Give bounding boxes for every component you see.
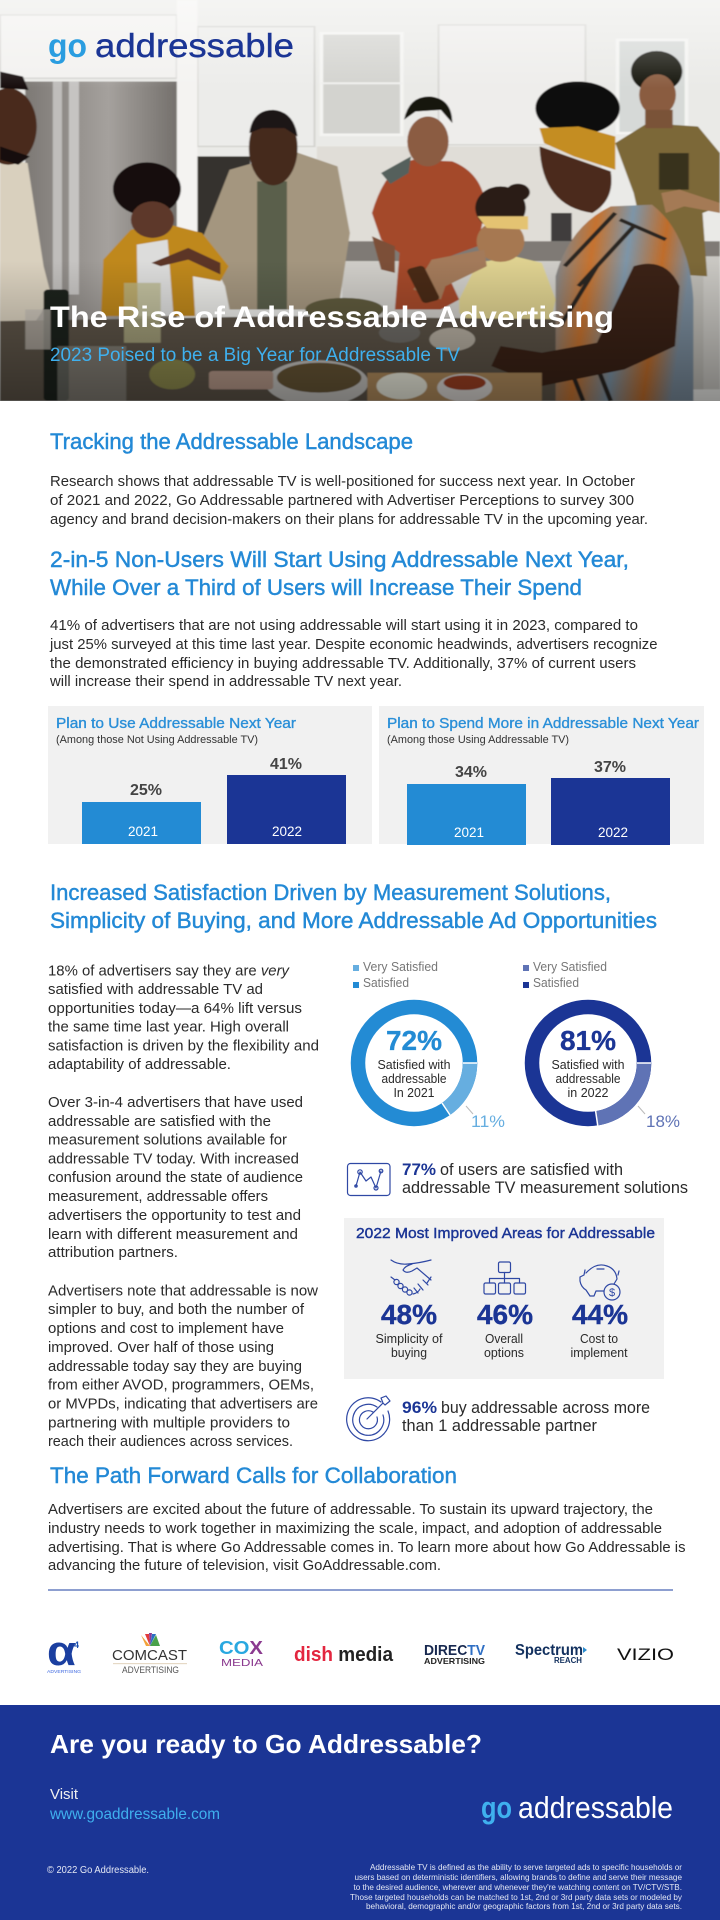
text block: non-user stats	[49, 618, 657, 690]
callout: 96% partners	[402, 1398, 650, 1435]
text block: satisfaction paragraph 1: 18% of advertisers say they are very	[48, 964, 290, 980]
icon: piggy bank	[580, 1265, 620, 1300]
text block: path forward	[48, 1502, 686, 1574]
legend: 2022: Satisfied	[533, 975, 579, 990]
bar: 2021	[82, 802, 201, 844]
logo: dish media: dish media	[294, 1644, 394, 1666]
heading: increased satisfaction: Simplicity of Buying, and More Addressable Ad Opportunities	[50, 908, 657, 933]
text block: satisfaction paragraph 2: attribution partners.	[48, 1245, 178, 1261]
panel: plan to use bar chart: Plan to Use Addressable Next Year	[56, 715, 296, 732]
panel: 2022 most improved areas: Simplicity of	[376, 1331, 443, 1346]
text block: research intro: agency and brand decision-makers on their plans for addressable TV in the upcoming year.	[50, 512, 648, 528]
text block: satisfaction paragraph 2: learn with different measurement and	[48, 1227, 298, 1243]
panel: plan to use bar chart: 2022	[272, 824, 302, 839]
footer logo: go	[481, 1790, 512, 1825]
legend: 2022	[523, 959, 607, 990]
text block: satisfaction paragraph 3: Advertisers note that addressable is now	[48, 1284, 319, 1300]
text block: satisfaction paragraph 3: from either AVOD, programmers, OEMs,	[48, 1378, 314, 1394]
bar: 2022	[227, 775, 346, 844]
donut chart: 2021 satisfaction: 11%	[471, 1112, 505, 1131]
donut chart: 2021 satisfaction: Satisfied with	[378, 1057, 450, 1072]
text block: satisfaction paragraph 1: opportunities today—a 64% lift versus	[48, 1001, 302, 1017]
logo: cox media: COX	[219, 1638, 263, 1658]
logo: a4 advertising: α	[47, 1627, 76, 1674]
text block: satisfaction paragraph 2: Over 3-in-4 advertisers that have used	[48, 1095, 303, 1111]
text block: satisfaction paragraph 3: options and cost to implement have	[48, 1321, 284, 1337]
text block: satisfaction paragraph 2: advertisers the opportunity to test and	[48, 1208, 301, 1224]
hero title: The Rise of Addressable Advertising	[50, 301, 614, 334]
heading: increased satisfaction	[50, 880, 657, 933]
text block: path forward: advertising. That is where Go Addressable comes in. To learn more about how Go Addressable is	[48, 1540, 686, 1556]
text block: satisfaction paragraph 1: the same time last year. High overall	[48, 1020, 289, 1036]
heading: non-users	[50, 547, 629, 600]
logo: comcast advertising: ADVERTISING	[122, 1665, 179, 1675]
panel: plan to spend bar chart	[379, 706, 704, 845]
text block: non-user stats: the demonstrated efficiency in buying addressable TV. Additionally, 37% of current users	[50, 656, 636, 672]
panel: 2022 most improved areas: buying	[391, 1345, 427, 1360]
text block: satisfaction paragraph 1: adaptability of addressable.	[48, 1057, 231, 1073]
callout: 96% partners: than 1 addressable partner	[402, 1416, 597, 1435]
logo: cox media	[219, 1638, 263, 1669]
icon: org chart	[484, 1262, 526, 1294]
legend: 2021: Satisfied	[363, 975, 409, 990]
text block: satisfaction paragraph 3: or MVPDs, indicating that advertisers are	[48, 1396, 318, 1412]
callout: 96% partners: 96%	[402, 1398, 437, 1417]
disclaimer: Addressable TV is defined as the ability to serve targeted ads to specific households or	[370, 1862, 682, 1872]
panel: 2022 most improved areas: 2022 Most Improved Areas for Addressable	[356, 1225, 655, 1242]
donut chart: 2021 satisfaction: In 2021	[394, 1085, 434, 1100]
heading: increased satisfaction: Increased Satisfaction Driven by Measurement Solutions,	[50, 880, 611, 905]
panel: 2022 most improved areas: 48%	[381, 1299, 437, 1330]
hero subtitle: 2023 Poised to be a Big Year for Addressable TV	[50, 344, 460, 366]
logo: vizio: VIZIO	[617, 1645, 674, 1664]
text block: satisfaction paragraph 3: simpler to buy, and both the number of	[48, 1302, 305, 1318]
text block: path forward: advancing the future of television, visit GoAddressable.com.	[48, 1558, 441, 1574]
callout: 77% measurement: addressable TV measurement solutions	[402, 1178, 688, 1197]
panel: plan to use bar chart: 2021	[128, 824, 158, 839]
footer logo: addressable	[518, 1790, 673, 1825]
disclaimer: users based on deterministic identifiers, allowing brands to define and serve their message	[354, 1872, 682, 1882]
panel: plan to spend bar chart: 2021	[454, 825, 484, 840]
donut chart: 2022 satisfaction: 18%	[646, 1112, 680, 1131]
panel: 2022 most improved areas: 44%	[572, 1299, 628, 1330]
disclaimer: behavioral, demographic and/or geographic factors from 1st, 2nd or 3rd party data sets.	[366, 1901, 682, 1911]
copyright: © 2022 Go Addressable.	[47, 1865, 149, 1876]
text block: satisfaction paragraph 2: addressable are satisfied with the	[48, 1114, 271, 1130]
logo: go addressable: addressable	[95, 27, 294, 64]
text block: satisfaction paragraph 2: measurement, addressable offers	[48, 1189, 268, 1205]
logo: directv advertising: ADVERTISING	[424, 1656, 485, 1666]
donut chart: 2022 satisfaction: Satisfied with	[552, 1057, 624, 1072]
legend: 2022: Very Satisfied	[533, 959, 607, 974]
text block: research intro: of 2021 and 2022, Go Addressable partnered with Advertiser Perceptions to survey 300	[50, 493, 634, 509]
text block: non-user stats: 41% of advertisers that are not using addressable will start using it in 2023, compared to	[50, 618, 638, 634]
donut chart: 2022 satisfaction: addressable	[556, 1071, 620, 1086]
icon: target with arrow	[347, 1396, 390, 1441]
text block: satisfaction paragraph 3: improved. Over half of those using	[48, 1340, 274, 1356]
heading: path forward: The Path Forward Calls for Collaboration	[50, 1463, 457, 1488]
text block: satisfaction paragraph 3: reach their audiences across services.	[48, 1434, 293, 1450]
donut chart: 2022 satisfaction: in 2022	[568, 1085, 608, 1100]
text block: satisfaction paragraph 2: confusion around the state of audience	[48, 1170, 303, 1186]
heading: non-users: While Over a Third of Users will Increase Their Spend	[50, 575, 582, 600]
panel: plan to spend bar chart: (Among those Using Addressable TV)	[387, 734, 569, 746]
panel: plan to use bar chart: 25%	[130, 782, 162, 799]
disclaimer	[350, 1862, 683, 1911]
url: www.goaddressable.com	[49, 1806, 220, 1823]
panel: plan to use bar chart: (Among those Not Using Addressable TV)	[56, 734, 258, 746]
text block: satisfaction paragraph 1: satisfied with addressable TV ad	[48, 982, 263, 998]
logo: cox media: MEDIA	[221, 1658, 263, 1669]
logo: comcast advertising	[112, 1633, 187, 1675]
text block: research intro: Research shows that addressable TV is well-positioned for success next year. In October	[50, 474, 635, 490]
donut chart: 2021 satisfaction	[353, 959, 505, 1131]
panel: 2022 most improved areas: 46%	[477, 1299, 533, 1330]
legend: 2021	[353, 959, 438, 990]
icon: piggy bank: $	[609, 1287, 615, 1299]
donut chart: 2021 satisfaction: 72%	[386, 1025, 442, 1056]
text block: path forward: Advertisers are excited about the future of addressable. To sustain its upward trajectory, the	[48, 1502, 653, 1518]
panel: 2022 most improved areas: Cost to	[580, 1331, 618, 1346]
bar: 2021	[407, 784, 526, 845]
panel: plan to spend bar chart: 34%	[455, 764, 487, 781]
icon: measurement line chart	[348, 1164, 390, 1196]
donut chart: 2021 satisfaction: addressable	[382, 1071, 446, 1086]
donut chart: 2022 satisfaction: 81%	[560, 1025, 616, 1056]
callout: 77% measurement: 77%	[402, 1160, 436, 1179]
panel: plan to spend bar chart: Plan to Spend More in Addressable Next Year	[387, 715, 699, 732]
panel: 2022 most improved areas: options	[484, 1345, 524, 1360]
logo: a4 advertising: 4	[74, 1640, 79, 1650]
text block: satisfaction paragraph 1	[48, 964, 319, 1073]
callout: 77% measurement: of users are satisfied with	[440, 1160, 623, 1179]
panel: plan to use bar chart	[48, 706, 372, 844]
logo: directv advertising: DIRECTV	[424, 1643, 485, 1659]
disclaimer: Those targeted households can be matched to 1st, 2nd or 3rd party data sets or modeled by	[350, 1892, 683, 1902]
footer heading: Are you ready to Go Addressable?	[50, 1729, 482, 1759]
logo: a4 advertising: ADVERTISING	[47, 1669, 81, 1674]
hero photo: family cooking in kitchen	[0, 0, 720, 401]
text block: satisfaction paragraph 3: partnering with multiple providers to	[48, 1416, 290, 1432]
text block: satisfaction paragraph 1: satisfaction is driven by the flexibility and	[48, 1038, 319, 1054]
heading: non-users: 2-in-5 Non-Users Will Start Using Addressable Next Year,	[50, 547, 629, 572]
visit text: Visit	[50, 1786, 79, 1803]
text block: satisfaction paragraph 3: addressable today say they are buying	[48, 1359, 302, 1375]
text block: research intro	[50, 474, 648, 528]
text block: satisfaction paragraph 3	[48, 1284, 319, 1450]
heading: tracking landscape: Tracking the Addressable Landscape	[50, 429, 413, 454]
callout: 96% partners: buy addressable across more	[441, 1398, 650, 1417]
callout: 77% measurement	[402, 1160, 688, 1197]
panel: plan to spend bar chart: 2022	[598, 825, 628, 840]
text block: non-user stats: just 25% surveyed at this time last year. Despite economic headwinds, advertisers recognize	[49, 637, 657, 653]
panel: 2022 most improved areas: Overall	[485, 1331, 523, 1346]
panel: plan to use bar chart: 41%	[270, 756, 302, 773]
panel: plan to spend bar chart: 37%	[594, 759, 626, 776]
logo: go addressable: go	[48, 27, 87, 64]
legend: 2021: Very Satisfied	[363, 959, 438, 974]
logo: comcast advertising: COMCAST	[112, 1647, 187, 1664]
icon: handshake	[391, 1260, 431, 1295]
text block: non-user stats: will increase their spend in addressable TV next year.	[49, 674, 402, 690]
panel: 2022 most improved areas: implement	[570, 1345, 628, 1360]
logo row: partners	[47, 1627, 674, 1675]
text block: satisfaction paragraph 2	[48, 1095, 303, 1261]
bar: 2022	[551, 778, 670, 845]
donut chart: 2022 satisfaction	[523, 959, 680, 1131]
footer panel	[0, 1705, 720, 1920]
logo: spectrum reach: Spectrum	[515, 1642, 583, 1659]
logo: spectrum reach: REACH	[554, 1656, 582, 1665]
text block: satisfaction paragraph 2: addressable TV today. With increased	[48, 1152, 299, 1168]
logo: directv advertising	[424, 1643, 485, 1666]
panel: 2022 most improved areas	[344, 1218, 664, 1379]
text block: satisfaction paragraph 2: measurement solutions available for	[48, 1132, 287, 1148]
disclaimer: to the desired audience, wherever and whenever they're watching content on TV/CTV/STB.	[354, 1882, 682, 1892]
text block: path forward: industry needs to work together in maximizing the scale, impact, and adoption of addressable	[48, 1521, 662, 1537]
